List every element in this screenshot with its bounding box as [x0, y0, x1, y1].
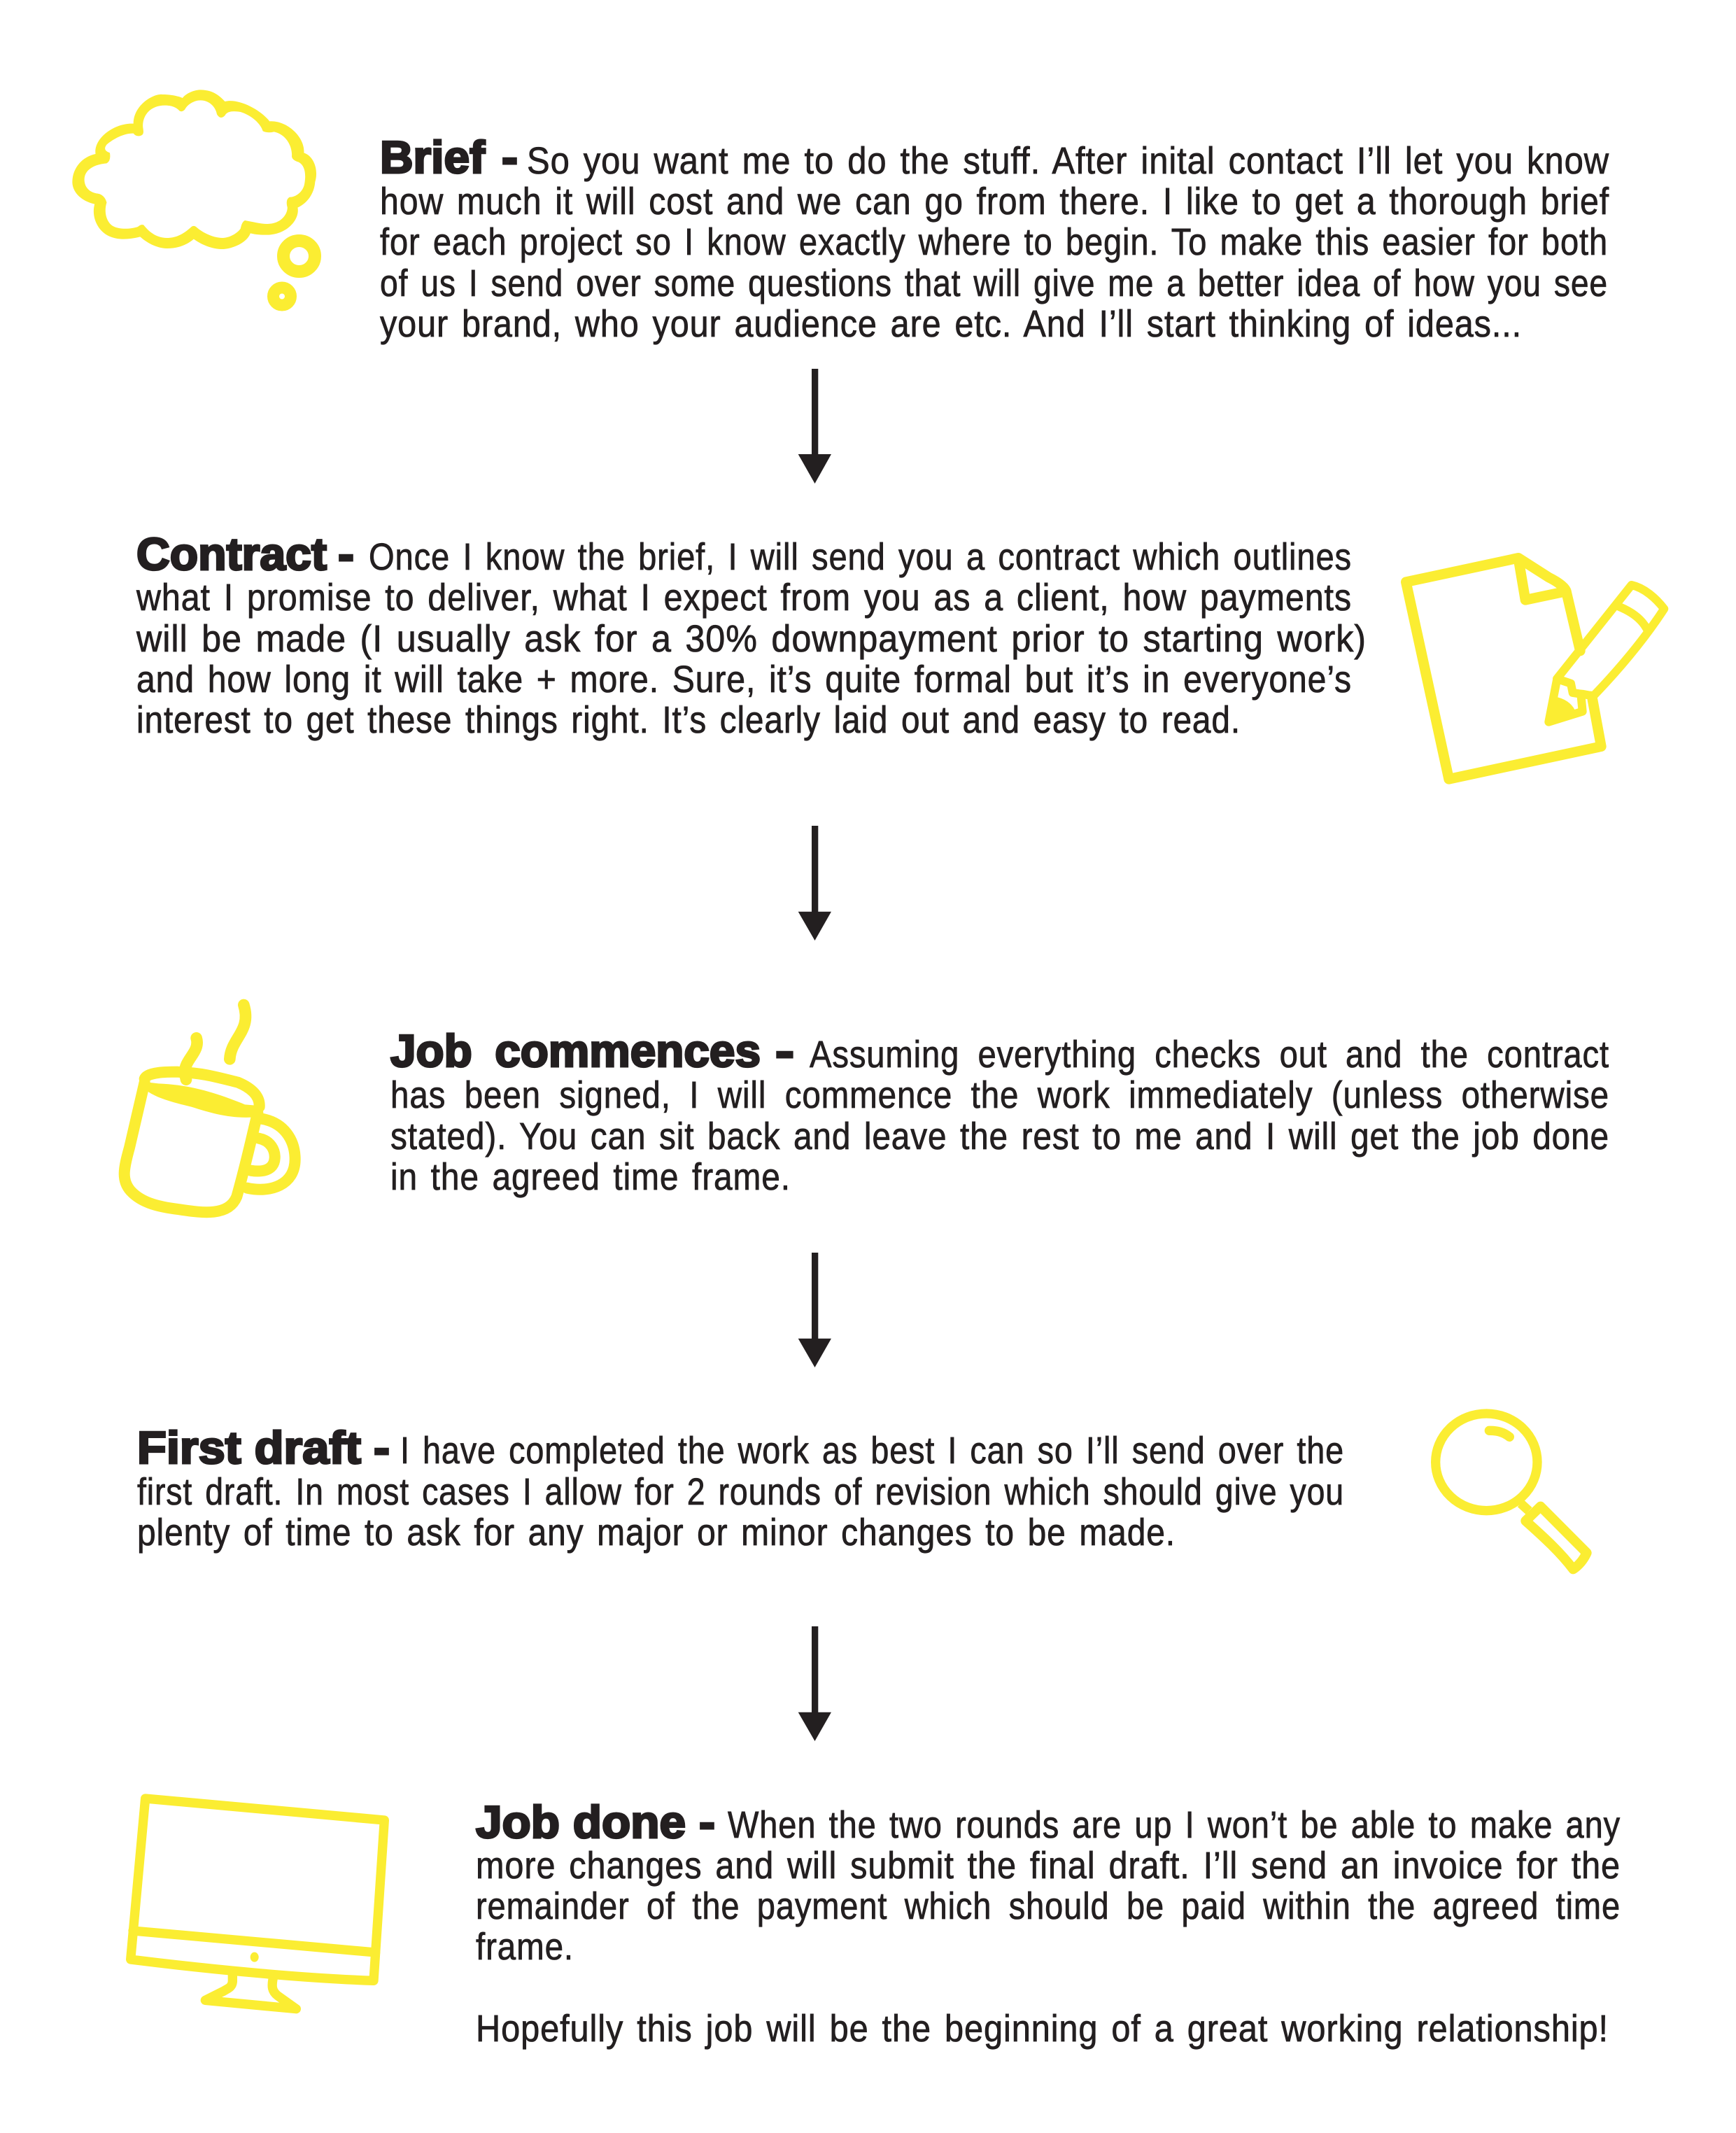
panel: brief text: So you want me to do the stuff. After inital contact I’ll let you know [527, 140, 1609, 182]
panel: contract text: what I promise to deliver, what I expect from you as a client, how payments [136, 577, 1352, 619]
paper [1406, 558, 1601, 779]
panel: job commences text [390, 1025, 1609, 1198]
panel: brief text: your brand, who your audience are etc. And I’ll start thinking of ideas... [380, 303, 1522, 345]
thought circles [273, 241, 315, 305]
lens [1436, 1414, 1537, 1511]
panel: first draft text: first draft. In most cases I allow for 2 rounds of revision which should give you [137, 1471, 1344, 1513]
panel: job done text: more changes and will submit the final draft. I’ll send an invoice for the [476, 1845, 1621, 1887]
panel: first draft text: plenty of time to ask for any major or minor changes to be made. [137, 1512, 1176, 1554]
arrow: job commences to first draft [798, 1253, 831, 1367]
heading: Brief: Brief [380, 132, 485, 183]
panel: contract text: Once I know the brief, I will send you a contract which outlines [369, 536, 1352, 578]
panel: brief text: - [502, 132, 518, 183]
panel: job commences text: in the agreed time frame. [390, 1156, 791, 1198]
panel: job commences text: Assuming everything checks out and the contract [810, 1034, 1609, 1076]
panel: job commences text: stated). You can sit back and leave the rest to me and I will get the job done [390, 1115, 1609, 1157]
handle [1525, 1507, 1587, 1569]
panel: first draft text: - [374, 1422, 390, 1473]
panel: contract text: - [338, 528, 354, 579]
icon: paper and pencil [1406, 558, 1664, 779]
panel: contract text [136, 528, 1367, 741]
panel: job commences text: - [775, 1025, 794, 1076]
icon: coffee mug [125, 1005, 295, 1212]
arrow: contract to job commences [798, 826, 831, 941]
panel: first draft text [137, 1422, 1344, 1554]
panel: job done text: frame. [476, 1926, 574, 1968]
steam [185, 1005, 246, 1080]
panel: job done text: - [699, 1796, 715, 1847]
panel: first draft text: I have completed the work as best I can so I’ll send over the [400, 1430, 1344, 1472]
heading: Job commences: Job commences [390, 1025, 761, 1076]
icon: thought bubble [72, 90, 316, 305]
heading: First draft: First draft [137, 1422, 361, 1473]
cloud [72, 90, 316, 249]
panel: contract text: will be made (I usually ask for a 30% downpayment prior to starting work) [136, 618, 1367, 660]
panel: brief text [380, 132, 1609, 345]
panel: job done text [476, 1796, 1621, 2050]
heading: Job done: Job done [476, 1796, 686, 1847]
icon: magnifying glass [1436, 1414, 1587, 1569]
panel: brief text: how much it will cost and we can go from there. I like to get a thorough brief [380, 181, 1609, 223]
panel: job done text: When the two rounds are up I won’t be able to make any [728, 1804, 1621, 1846]
closing line: Hopefully this job will be the beginning of a great working relationship! [476, 2008, 1609, 2050]
icon: desktop monitor [131, 1798, 384, 2009]
pencil [1548, 585, 1664, 722]
arrow: brief to contract [798, 369, 831, 484]
panel: contract text: and how long it will take + more. Sure, it’s quite formal but it’s in everyone’s [136, 659, 1352, 701]
panel: contract text: interest to get these things right. It’s clearly laid out and easy to read. [136, 699, 1241, 741]
heading: Contract: Contract [136, 528, 327, 579]
arrow: first draft to job done [798, 1626, 831, 1741]
panel: job commences text: has been signed, I will commence the work immediately (unless otherwise [390, 1074, 1609, 1116]
